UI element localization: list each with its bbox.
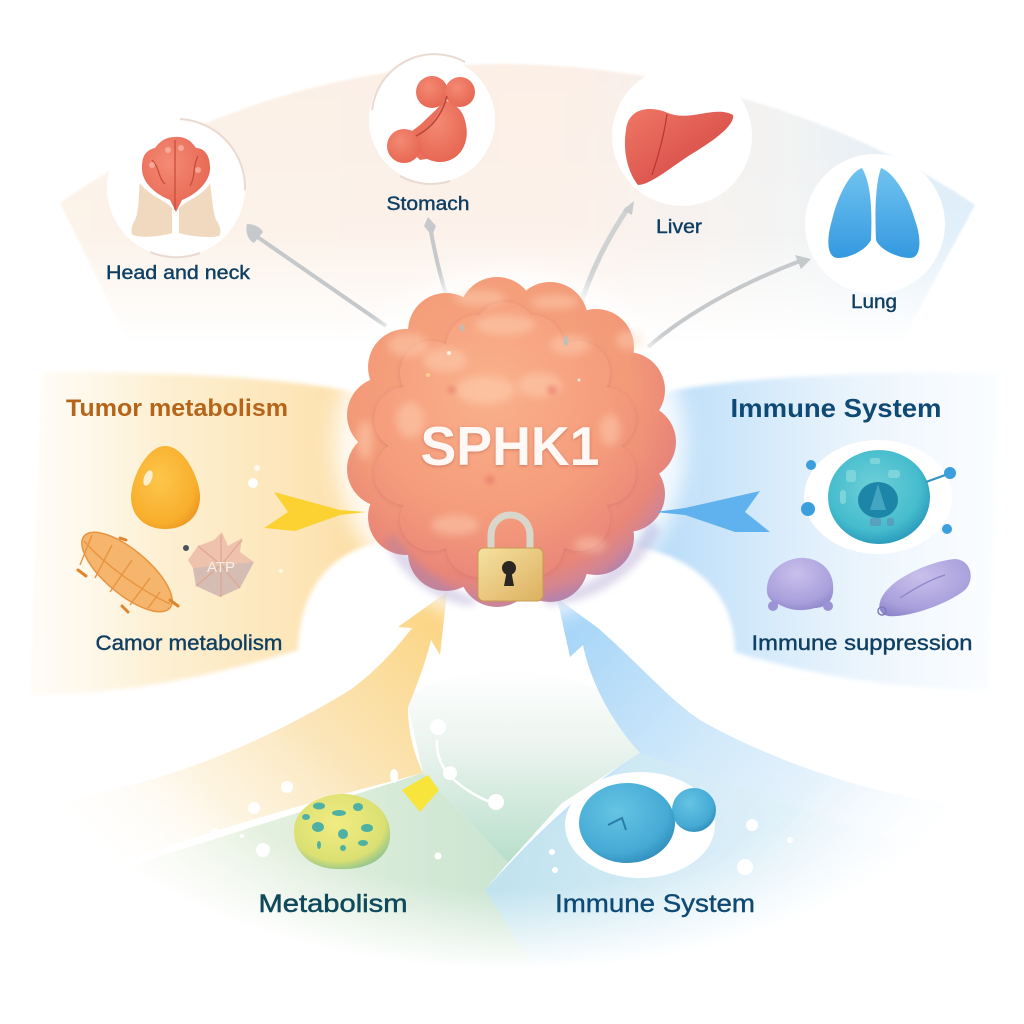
panel: organs arc xyxy=(60,64,975,309)
tumor outer lobes xyxy=(347,277,676,607)
arrow: blue wide xyxy=(485,600,890,912)
arrow: liver xyxy=(577,201,634,316)
tumor bottom shade xyxy=(385,520,660,606)
label: stomach: Stomach xyxy=(386,194,470,215)
arrow: yellow wide xyxy=(125,592,447,842)
icon: ATP: ATP xyxy=(207,559,235,576)
label: lung: Lung xyxy=(851,292,897,313)
icon: purple cell right xyxy=(878,559,971,616)
arrow: yellow to tumor xyxy=(264,492,366,531)
title: SPHK1: SPHK1 xyxy=(420,415,600,477)
decorative particles: left panel xyxy=(248,465,283,573)
icon: immune cell xyxy=(801,440,956,554)
panel: immune system xyxy=(630,372,1000,690)
tumor middle lobes xyxy=(374,302,636,577)
icon: lipid droplet xyxy=(131,446,200,529)
label: metabolism: Metabolism xyxy=(258,890,408,918)
label: immune system bottom: Immune System xyxy=(555,890,755,918)
icon: ATP xyxy=(183,532,254,597)
label: immune suppression: Immune suppression xyxy=(752,632,972,655)
icon: lung xyxy=(805,154,945,294)
heading: tumor metabolism: Tumor metabolism xyxy=(66,395,288,422)
tumor: SPHK1 mass xyxy=(347,277,676,607)
icon: stomach xyxy=(369,54,495,184)
panel: blue lower xyxy=(485,812,762,916)
panel: bottom region xyxy=(125,592,890,958)
icon: purple cell left xyxy=(767,558,833,611)
tumor red spots xyxy=(448,385,557,485)
panel: green lower left xyxy=(167,773,526,957)
label: liver: Liver xyxy=(656,217,703,238)
tumor glow xyxy=(334,269,686,621)
icon: yellow diamond xyxy=(402,775,439,812)
arrow: blue to tumor xyxy=(655,491,770,532)
icon: head and neck xyxy=(107,119,245,257)
tumor highlight specks xyxy=(426,351,580,382)
arrow: head and neck xyxy=(246,224,386,326)
decorative particles xyxy=(210,719,793,875)
arrow tails inside tumor xyxy=(460,324,568,346)
icon: metabolism cell xyxy=(294,794,390,869)
arrow: stomach xyxy=(424,217,447,298)
icon: immune cells bottom xyxy=(565,772,716,878)
label: head and neck: Head and neck xyxy=(106,263,251,284)
heading: immune system right: Immune System xyxy=(730,393,942,423)
icon: mitochondrion xyxy=(70,519,184,625)
icon: padlock xyxy=(478,515,543,601)
tumor soft highlights xyxy=(357,290,644,553)
icon: liver xyxy=(612,66,752,206)
label: camor metabolism: Camor metabolism xyxy=(96,632,282,655)
panel: green lobe xyxy=(408,701,640,863)
arrow: lung xyxy=(648,255,811,347)
panel: tumor metabolism xyxy=(30,372,395,695)
